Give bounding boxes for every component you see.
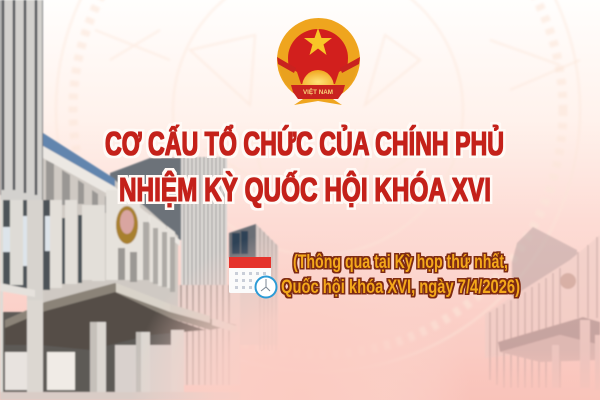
emblem ribbon xyxy=(291,85,345,99)
facade columns xyxy=(50,200,105,288)
subtitle xyxy=(281,252,520,298)
lower tower xyxy=(0,200,50,290)
building: right faded xyxy=(485,227,600,390)
main facade wall xyxy=(43,133,178,320)
left building fade xyxy=(120,230,470,400)
emblem red field xyxy=(288,29,348,84)
rear grey tower xyxy=(110,158,181,240)
right dark tower xyxy=(512,227,577,310)
right emblem xyxy=(560,273,576,289)
clock xyxy=(256,276,276,298)
subtitle line 1: (Thông qua tại Kỳ họp thứ nhất, xyxy=(293,252,508,273)
emblem rice sheaves xyxy=(277,60,360,92)
calendar header xyxy=(229,257,271,268)
icon: calendar and clock xyxy=(229,257,276,298)
lower far slats xyxy=(178,285,240,385)
title xyxy=(105,125,504,208)
left tall column block xyxy=(0,0,43,200)
ground xyxy=(0,392,240,400)
right fade bottom xyxy=(440,350,600,400)
icon: building emblem xyxy=(116,206,138,244)
right columns xyxy=(552,320,600,390)
emblem panel xyxy=(106,190,140,280)
subtitle line 2: Quốc hội khóa XVI, ngày 7/4/2026) xyxy=(281,277,520,298)
calendar body xyxy=(229,257,271,293)
small far block xyxy=(229,224,278,345)
ground level dark xyxy=(0,312,172,392)
national emblem xyxy=(277,18,360,105)
right facade slats xyxy=(140,208,175,288)
right main facade xyxy=(485,235,600,358)
porch columns xyxy=(27,300,184,400)
emblem gear xyxy=(302,70,334,87)
emblem base xyxy=(294,99,342,105)
calendar dots xyxy=(235,272,266,289)
building: left main xyxy=(0,0,278,400)
emblem gold ring xyxy=(277,18,360,95)
emblem star xyxy=(304,28,332,55)
canopy roof xyxy=(5,283,237,330)
upper window panels xyxy=(46,160,110,213)
emblem label: VIỆT NAM xyxy=(303,88,333,96)
right canopy xyxy=(498,317,600,352)
